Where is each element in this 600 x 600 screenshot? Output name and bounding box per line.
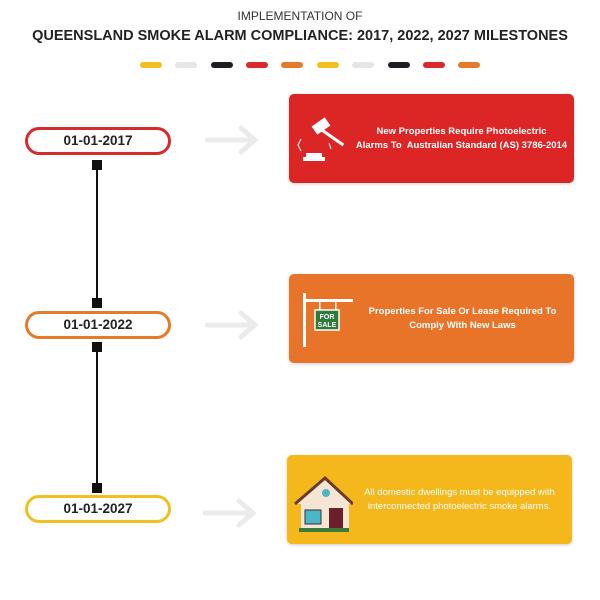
panel 2027: All domestic dwellings must be equipped with bbox=[364, 486, 555, 498]
title: QUEENSLAND SMOKE ALARM COMPLIANCE: 2017, 2022, 2027 MILESTONES bbox=[32, 28, 568, 44]
dash row bbox=[140, 62, 480, 68]
panel 2022: Comply With New Laws bbox=[409, 320, 516, 330]
icon: gavel bbox=[298, 117, 344, 161]
subtitle: IMPLEMENTATION OF bbox=[238, 9, 362, 23]
icon: house bbox=[294, 476, 353, 532]
date 2017 bbox=[25, 127, 171, 155]
arrow 3 bbox=[203, 498, 256, 528]
panel 2017: New Properties Require Photoelectric bbox=[376, 126, 546, 136]
arrow 1 bbox=[205, 126, 258, 154]
icon: for sale sign: SALE bbox=[318, 322, 337, 328]
panel 2027: interconnected photoelectric smoke alarms. bbox=[368, 500, 551, 512]
panel 2017: Alarms To Australian Standard (AS) 3786-2014 bbox=[356, 140, 567, 150]
panel 2022 bbox=[289, 274, 574, 363]
date 2027: 01-01-2027 bbox=[63, 501, 133, 516]
arrow 2 bbox=[205, 310, 258, 340]
timeline line bbox=[92, 160, 102, 493]
panel 2022: Properties For Sale Or Lease Required To bbox=[369, 306, 556, 316]
date 2027 bbox=[25, 495, 171, 523]
icon: for sale sign: FOR bbox=[320, 314, 334, 320]
date 2022: 01-01-2022 bbox=[63, 317, 133, 332]
panel 2017 bbox=[289, 94, 574, 183]
panel 2027 bbox=[287, 455, 572, 544]
icon: for sale sign bbox=[303, 293, 353, 347]
date 2022 bbox=[25, 311, 171, 339]
date 2017: 01-01-2017 bbox=[63, 133, 133, 148]
